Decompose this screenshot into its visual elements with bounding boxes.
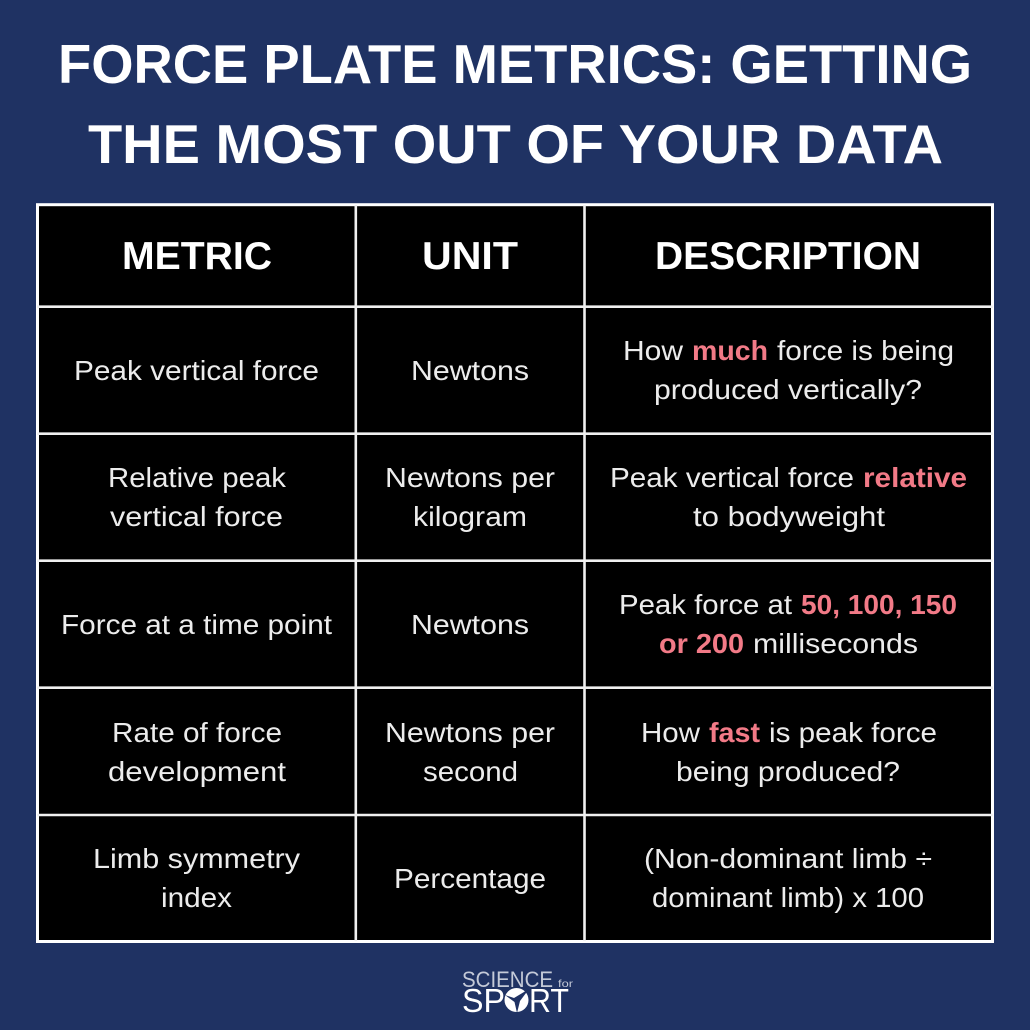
row: limb symmetry index: dominant limb) x 100 (652, 882, 924, 913)
table header row (122, 235, 921, 278)
row: rate of force development: development (108, 756, 286, 787)
row: force at a time point: Peak force at (619, 589, 792, 620)
row: limb symmetry index: Percentage (394, 863, 546, 894)
row: force at a time point (61, 589, 957, 659)
title: FORCE PLATE METRICS: GETTING (58, 33, 972, 95)
row: rate of force development: is peak force (769, 717, 937, 748)
title (58, 33, 972, 175)
row: rate of force development: Newtons per (385, 717, 555, 748)
table header row: DESCRIPTION (655, 235, 921, 278)
row: peak vertical force: produced vertically? (654, 374, 922, 405)
row: peak vertical force: force is being (777, 335, 954, 366)
row: relative peak vertical force: Relative peak (108, 462, 287, 493)
logo: Science for Sport (462, 967, 574, 1019)
table header row: UNIT (422, 235, 518, 278)
row: relative peak vertical force: kilogram (413, 501, 527, 532)
row: limb symmetry index (93, 843, 932, 913)
row: peak vertical force (74, 335, 954, 405)
row: rate of force development: How (641, 717, 701, 748)
row: force at a time point: Newtons (411, 609, 529, 640)
logo: Science for Sport: for (558, 979, 574, 990)
row: limb symmetry index: (Non-dominant limb ÷ (644, 843, 932, 874)
row: relative peak vertical force: Newtons per (385, 462, 555, 493)
title: THE MOST OUT OF YOUR DATA (88, 113, 943, 175)
row: peak vertical force: Newtons (411, 355, 529, 386)
row: relative peak vertical force: relative (863, 462, 967, 493)
row: relative peak vertical force: Peak vertical force (610, 462, 854, 493)
row: rate of force development: fast (709, 717, 760, 748)
row: peak vertical force: How (623, 335, 684, 366)
logo: Science for Sport: RT (529, 982, 569, 1019)
row: force at a time point: 50, 100, 150 (801, 589, 957, 620)
row: rate of force development: second (423, 756, 518, 787)
row: rate of force development: being produced? (676, 756, 900, 787)
logo: Science for Sport: SCIENCE (462, 967, 553, 992)
row: limb symmetry index: Limb symmetry (93, 843, 300, 874)
table header row: METRIC (122, 235, 272, 278)
row: force at a time point: Force at a time point (61, 609, 332, 640)
row: peak vertical force: much (692, 335, 768, 366)
row: force at a time point: or 200 (659, 628, 744, 659)
row: limb symmetry index: index (161, 882, 232, 913)
row: relative peak vertical force (108, 462, 967, 532)
row: relative peak vertical force: to bodyweight (693, 501, 885, 532)
row: rate of force development: Rate of force (112, 717, 282, 748)
table grid (37, 205, 993, 941)
row: force at a time point: milliseconds (753, 628, 918, 659)
table (37, 205, 993, 941)
row: peak vertical force: Peak vertical force (74, 355, 319, 386)
row: rate of force development (108, 717, 937, 787)
row: relative peak vertical force: vertical force (110, 501, 283, 532)
logo: Science for Sport: SP (462, 982, 505, 1019)
icon: logo ball (504, 988, 529, 1013)
